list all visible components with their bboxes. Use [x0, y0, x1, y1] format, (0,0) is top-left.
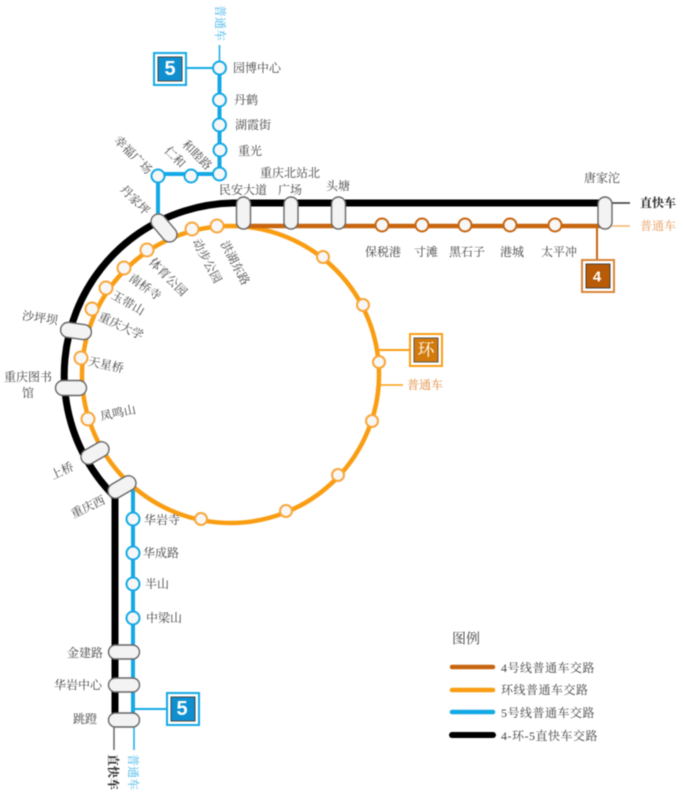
station labels: south: 华岩中心	[54, 677, 103, 692]
station labels: ring west: 天星桥	[87, 353, 125, 376]
ring line: loop route	[82, 226, 379, 523]
badge: ring line	[379, 334, 442, 366]
station labels: express west: 重庆图书	[4, 369, 52, 384]
badge: line 5 north	[154, 53, 186, 85]
service labels: 直快车	[106, 754, 121, 790]
legend: 4-环-5直快车交路	[501, 728, 598, 743]
station labels: ring west: 动步公园	[190, 236, 225, 285]
station labels: south: 跳蹬	[73, 711, 97, 726]
station labels: ring west: 玉带山	[109, 287, 148, 318]
line 5 stations	[126, 62, 226, 624]
interchange capsules	[56, 197, 612, 727]
station labels: line 4: 太平冲	[541, 244, 577, 259]
legend: 5号线普通车交路	[501, 705, 595, 720]
legend: 4号线普通车交路	[501, 660, 595, 675]
badge: line 5 north: 5	[164, 58, 176, 80]
station labels: ring west: 重庆大学	[96, 309, 146, 342]
station labels: line 4: 港城	[500, 244, 524, 259]
service labels: 普通车	[213, 5, 227, 41]
station labels: ring west	[87, 236, 253, 424]
line 5 north route	[158, 45, 220, 224]
station labels: line 4	[365, 244, 577, 259]
station labels: south: 金建路	[67, 645, 103, 660]
line 4 route	[245, 226, 600, 260]
badge: ring line: 环	[418, 340, 436, 360]
legend	[452, 632, 598, 743]
station labels: south: 中梁山	[146, 610, 182, 625]
station labels: line 5 north: 丹家坪	[117, 182, 153, 218]
badge: line 5 south	[167, 693, 199, 725]
station labels: line 5 north: 湖霞街	[235, 117, 271, 132]
station labels: line 5 north: 幸福广场	[111, 132, 156, 177]
service labels: 直快车	[640, 195, 676, 210]
station labels: express top: 重庆北站北	[260, 165, 320, 180]
station labels: line 5 north: 重光	[238, 143, 262, 158]
badge: line 5 south: 5	[176, 698, 188, 720]
station labels: south: 华岩寺	[144, 512, 180, 527]
station labels: line 5 north: 和睦路	[179, 137, 215, 173]
service labels: 普通车	[126, 754, 140, 790]
station labels: ring west: 体育公园	[146, 254, 191, 299]
station labels: ring west: 南桥寺	[126, 270, 164, 303]
station labels: express top: 头塘	[326, 178, 350, 193]
service labels: 普通车	[640, 219, 676, 233]
station labels: line 5 north: 仁和	[162, 144, 188, 170]
station labels: express west: 上桥	[48, 459, 76, 482]
legend: 图例	[452, 632, 480, 648]
station labels: express west: 沙坪坝	[21, 308, 60, 328]
line 4 stations	[376, 218, 562, 232]
station labels: line 5 north: 丹鹤	[234, 93, 258, 107]
line 5 south route	[133, 490, 166, 750]
station labels: line 4: 寸滩	[414, 244, 438, 259]
station labels: line 4: 黑石子	[449, 245, 485, 259]
express line route	[64, 203, 605, 722]
station labels: express top: 广场	[278, 182, 302, 197]
station labels: line 4: 保税港	[365, 244, 401, 259]
express terminal stub	[113, 726, 115, 750]
station labels: express west: 重庆西	[68, 492, 107, 521]
ring stations	[74, 220, 385, 525]
station labels: line 5 north	[111, 60, 282, 218]
station labels: south: 半山	[145, 576, 169, 591]
station labels: south	[54, 512, 182, 726]
station labels: express top: 唐家沱	[584, 170, 620, 185]
badge: line 4: 4	[593, 268, 602, 286]
ring service label	[379, 378, 443, 392]
station labels: ring west: 凤鸣山	[99, 402, 137, 424]
station labels: express top: 民安大道	[219, 182, 267, 197]
station labels: ring west: 洪湖东路	[218, 238, 253, 287]
station labels: express west: 馆	[22, 385, 34, 400]
station labels: express west	[4, 308, 107, 521]
station labels: express top	[219, 165, 620, 197]
right terminal stubs	[612, 203, 630, 226]
legend: 环线普通车交路	[501, 682, 589, 697]
ring service label: 普通车	[407, 378, 443, 392]
badge: line 4	[582, 260, 614, 292]
station labels: south: 华成路	[143, 545, 179, 560]
station labels: line 5 north: 园博中心	[233, 60, 282, 75]
